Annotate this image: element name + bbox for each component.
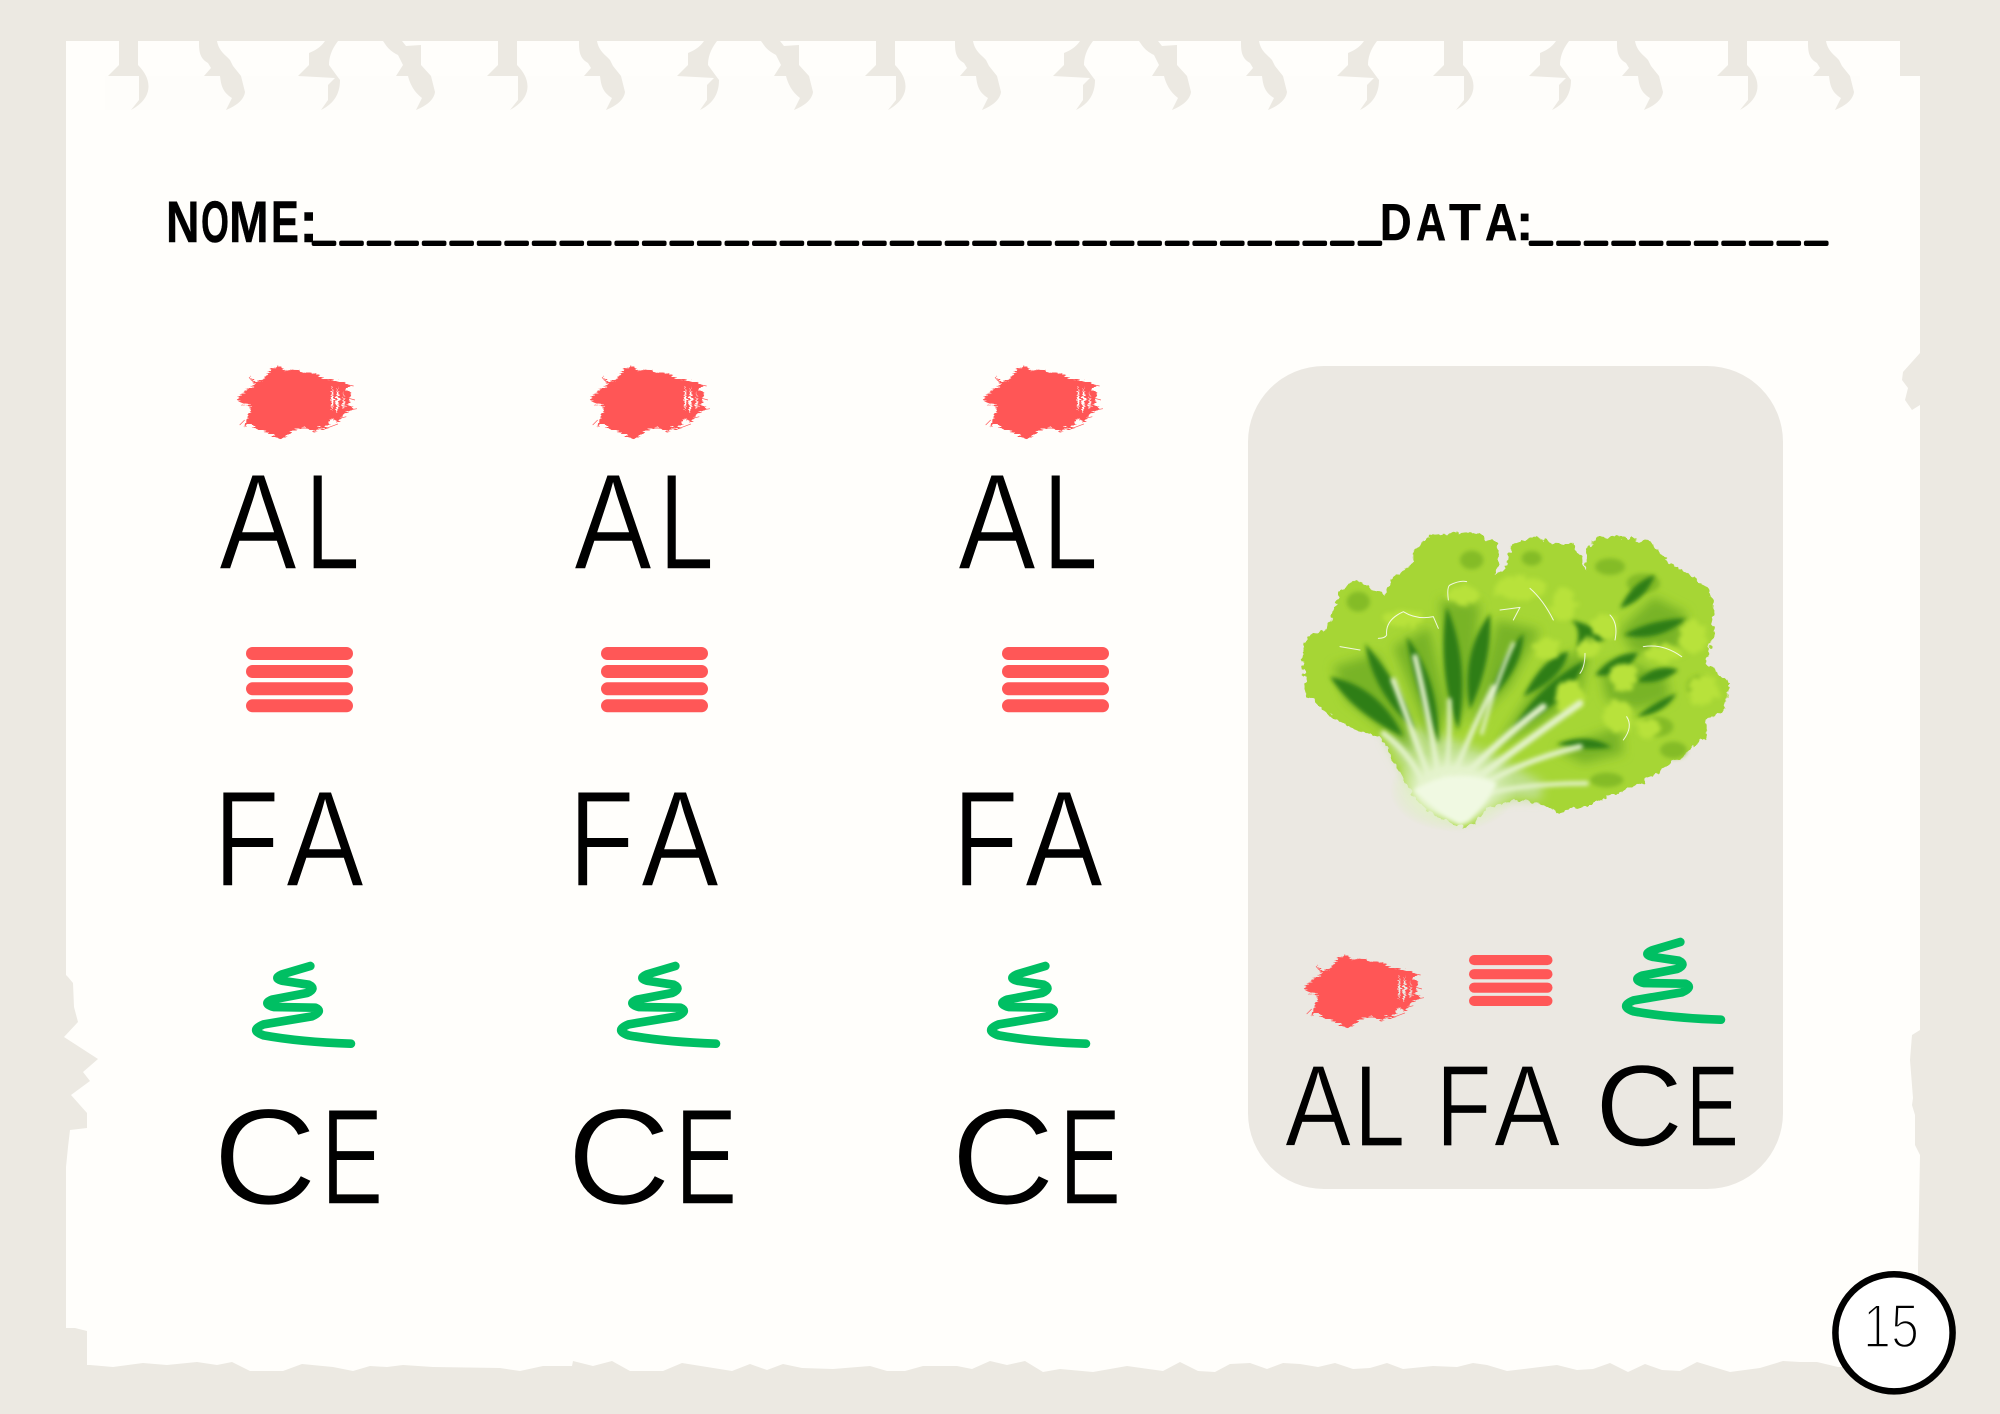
syllable AL: A [1285, 1041, 1351, 1171]
syllable AL [1285, 1041, 1405, 1171]
pale base glow [1390, 748, 1517, 832]
heading: name and date line [166, 190, 1834, 255]
syllable FA column 2: F [569, 763, 634, 916]
syllable CE column 3: E [1059, 1081, 1121, 1234]
syllable FA column 2 [569, 763, 719, 916]
leaf silhouette [1302, 532, 1730, 827]
icon: green scribble column 3 [986, 962, 1090, 1048]
icon: red blot column 1 [236, 365, 357, 440]
syllable AL: L [1354, 1041, 1405, 1171]
label: DATA: A [1416, 194, 1446, 252]
syllable FA column 1 [214, 763, 364, 916]
syllable AL column 3: L [1043, 446, 1098, 599]
syllable FA: A [1494, 1041, 1560, 1171]
syllable CE: C [1595, 1041, 1683, 1171]
icon: green scribble [1622, 938, 1726, 1024]
icon: red bars column 2 [601, 647, 708, 712]
syllable AL column 3 [958, 446, 1098, 599]
label: NOME: M [229, 190, 269, 255]
syllable FA: F [1436, 1041, 1491, 1171]
illustration: lettuce [1300, 532, 1730, 830]
icon: green scribble column 1 [252, 962, 356, 1048]
icon: red blot [1304, 954, 1424, 1028]
syllable FA column 3 [953, 763, 1102, 916]
syllable CE column 3 [951, 1081, 1121, 1234]
syllable FA [1436, 1041, 1560, 1171]
syllable CE [1595, 1041, 1738, 1171]
syllable AL column 1 [219, 446, 360, 599]
icon: red blot column 2 [590, 365, 710, 440]
syllable AL column 2: L [659, 446, 714, 599]
label: DATA: : [1516, 194, 1533, 252]
lime frills over veins [1383, 577, 1718, 738]
pale outer ribs at base [1385, 727, 1543, 822]
label: DATA [1380, 194, 1533, 252]
syllable CE column 2: C [567, 1081, 671, 1234]
icon: red bars column 1 [246, 647, 353, 712]
mid green leaf bodies [1333, 597, 1687, 763]
label: NOME [166, 190, 318, 255]
number 15: 15 [1863, 1292, 1919, 1362]
page number badge [1832, 1271, 1956, 1395]
syllable CE column 1 [213, 1081, 383, 1234]
syllable CE column 1: C [213, 1081, 317, 1234]
pale ribs [1383, 643, 1587, 793]
stem core [1413, 776, 1497, 825]
icon: green scribble column 2 [616, 962, 720, 1048]
dark green veins [1330, 575, 1687, 749]
label: NOME: E [271, 190, 299, 255]
label: NOME: N [166, 190, 199, 255]
syllable FA column 1: A [286, 763, 364, 916]
syllable AL column 3: A [958, 446, 1035, 599]
syllable CE column 3: C [951, 1081, 1055, 1234]
syllable FA column 3: F [953, 763, 1018, 916]
icon: red blot column 3 [982, 365, 1103, 440]
syllable FA column 3: A [1024, 763, 1102, 916]
syllable AL column 1: L [305, 446, 360, 599]
blank lines for name and date: _______________________________________ [313, 207, 1387, 248]
label: DATA: D [1380, 194, 1411, 252]
syllable CE column 2 [567, 1081, 737, 1234]
syllable AL column 1: A [219, 446, 297, 599]
syllable FA column 2: A [641, 763, 719, 916]
syllable AL column 2: A [574, 446, 652, 599]
glossy highlights [1340, 581, 1682, 740]
label: NOME: : [299, 190, 318, 255]
upper patches of darker lime [1347, 551, 1713, 787]
syllable CE: E [1686, 1041, 1738, 1171]
syllable CE column 2: E [675, 1081, 737, 1234]
label: DATA: T [1449, 194, 1481, 252]
syllable AL column 2 [574, 446, 714, 599]
blank lines for name and date: ___________ [1530, 207, 1834, 248]
icon: red bars [1468, 955, 1552, 1006]
syllable FA column 1: F [214, 763, 279, 916]
panel: lettuce word card [1248, 366, 1783, 1189]
label: DATA: A [1485, 194, 1517, 252]
syllable CE column 1: E [321, 1081, 383, 1234]
icon: red bars column 3 [1002, 647, 1109, 712]
label: NOME: O [201, 190, 229, 255]
